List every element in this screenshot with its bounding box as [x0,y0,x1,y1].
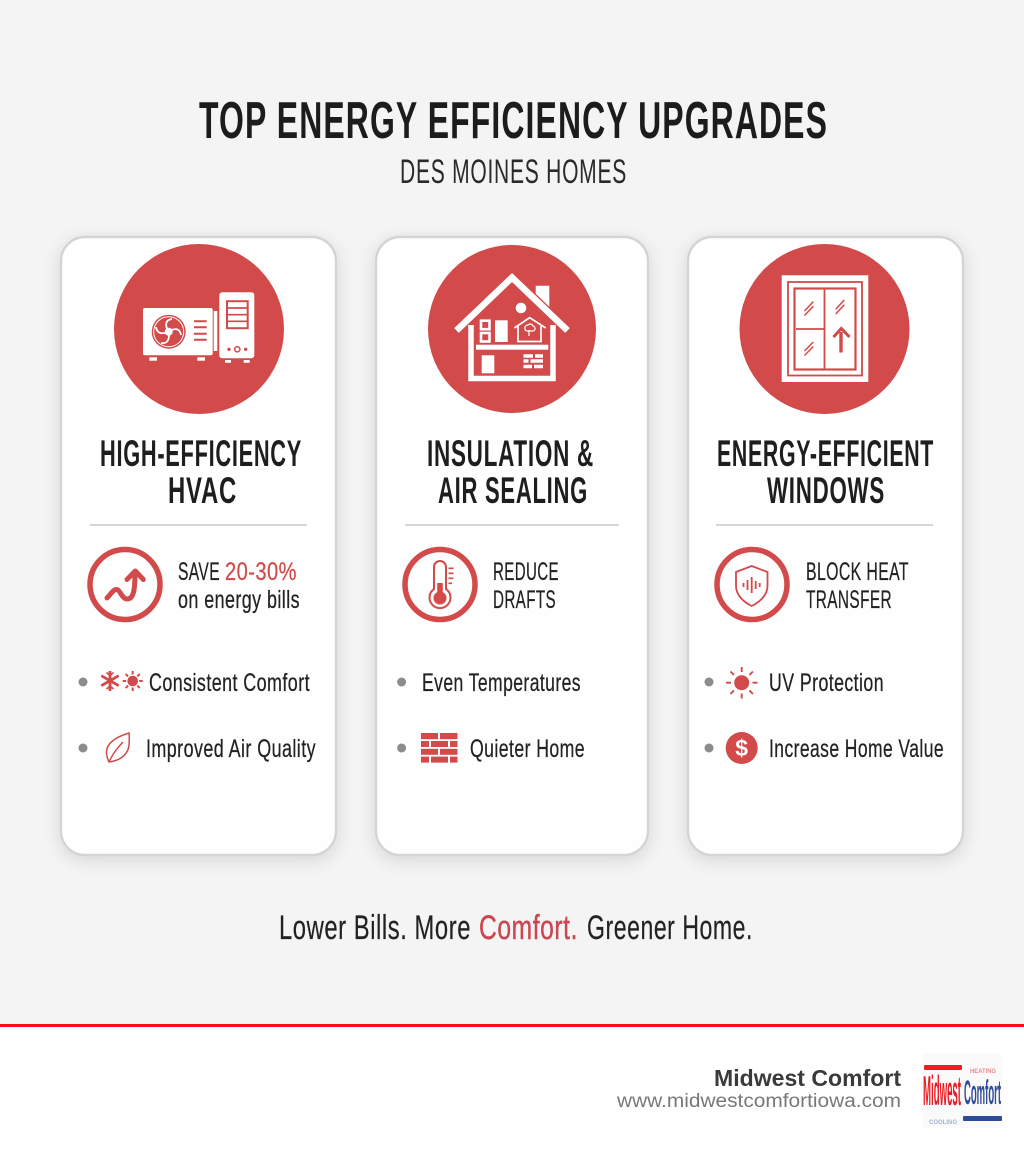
heading: HIGH-EFFICIENCY [100,433,302,474]
logo [922,1053,1002,1128]
heading: INSULATION & [427,433,594,474]
icon: shield [717,550,787,620]
drafts text [493,558,559,614]
drafts text: DRAFTS [493,586,556,614]
savings text: 20-30% [225,558,297,586]
benefit: improved air quality [78,733,316,763]
icon: savings trend [90,550,160,620]
heading: WINDOWS [767,470,885,511]
benefit: increase home value [704,732,944,764]
heading [427,433,594,511]
benefit: increase home value: Increase Home Value [769,735,944,763]
heading [100,433,302,511]
subtitle: DES MOINES HOMES [400,153,627,191]
benefit: even temperatures: Even Temperatures [422,669,581,697]
website: www.midwestcomfortiowa.com [616,1091,901,1112]
footer [0,1024,1024,1154]
savings text: SAVE [178,558,220,586]
panel: insulation and air sealing [376,237,648,855]
savings text: on energy bills [178,586,300,614]
tagline: Greener Home. [587,909,753,947]
heat transfer text: BLOCK HEAT [806,558,909,586]
heading: HVAC [168,470,237,511]
benefit: UV protection [704,667,884,698]
drafts text: REDUCE [493,558,559,586]
heading: AIR SEALING [438,470,588,511]
benefit: consistent comfort [78,669,310,697]
logo: COOLING [929,1120,957,1126]
tagline: Comfort. [479,909,578,947]
tagline [279,909,753,947]
benefit: even temperatures [397,669,581,697]
benefit: consistent comfort: Consistent Comfort [149,669,310,697]
benefit: quieter home: Quieter Home [470,735,585,763]
benefit: improved air quality: Improved Air Quality [146,735,316,763]
heat transfer text: TRANSFER [806,586,892,614]
company name: Midwest Comfort [714,1065,901,1091]
icon: window [740,244,910,414]
heading [717,433,934,511]
panel: high-efficiency HVAC [61,237,336,855]
icon: house cross-section [428,245,596,413]
logo: HEATING [970,1069,996,1075]
heat transfer text [806,558,909,614]
icon: thermometer [405,550,475,620]
tagline: Lower Bills. More [279,909,471,947]
benefit: UV protection: UV Protection [769,669,884,697]
panel: energy-efficient windows [688,237,963,855]
benefit: increase home value: $ [735,735,748,761]
savings text [178,558,300,614]
benefit: quieter home [397,733,585,763]
icon: HVAC units [114,244,284,414]
